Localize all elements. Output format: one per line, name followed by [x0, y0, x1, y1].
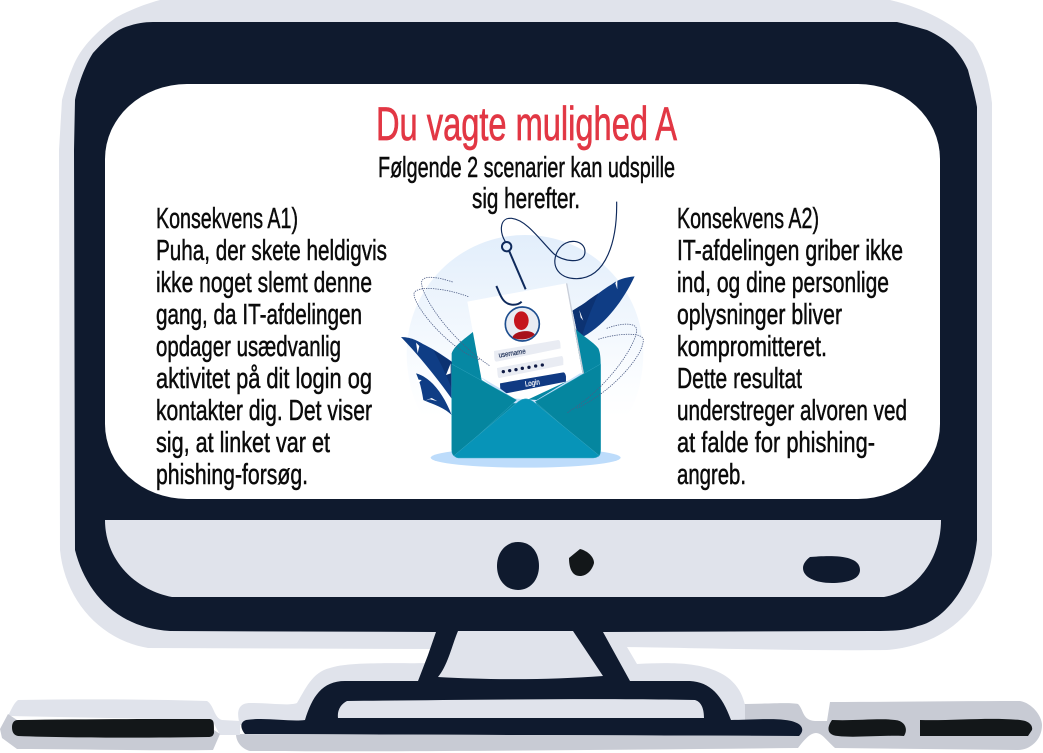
text block: Konsekvens A2: understreger alvoren ved — [677, 395, 907, 427]
paper — [467, 283, 583, 403]
login button: Login — [524, 377, 540, 389]
dotted swirls — [414, 277, 643, 413]
text block: Konsekvens A2: ind, og dine personlige — [677, 267, 889, 299]
monitor chin panel — [105, 520, 941, 597]
text block: Konsekvens A1: Konsekvens A1) — [156, 203, 298, 235]
monitor screen — [105, 84, 940, 499]
subtitle: sig herefter. — [472, 183, 580, 215]
camera lens — [497, 542, 539, 590]
text block: Konsekvens A1: ikke noget slemt denne — [156, 267, 372, 299]
text block: Konsekvens A1: kontakter dig. Det viser — [156, 395, 372, 427]
text block: Konsekvens A2: oplysninger bliver — [677, 299, 842, 331]
power button — [569, 549, 594, 576]
text block: Konsekvens A1: Puha, der skete heldigvis — [156, 235, 387, 267]
text block: Konsekvens A1: sig, at linket var et — [156, 427, 330, 459]
text block: Konsekvens A2 — [677, 203, 907, 491]
text block: Konsekvens A1: gang, da IT-afdelingen — [156, 299, 362, 331]
text block: Konsekvens A2: IT-afdelingen griber ikke — [677, 235, 903, 267]
right key 1 — [828, 719, 906, 737]
text block: Konsekvens A1 — [156, 203, 387, 491]
fishing hook — [496, 242, 526, 305]
pale inner envelope — [480, 373, 583, 403]
text block: Konsekvens A1: phishing-forsøg. — [156, 459, 308, 491]
stand base opening — [338, 699, 704, 718]
keyboard right section — [740, 701, 1042, 750]
text block: Konsekvens A2: at falde for phishing- — [677, 427, 875, 459]
text block: Konsekvens A2: Konsekvens A2) — [677, 203, 819, 235]
keyboard — [0, 699, 1032, 751]
monitor stand neck — [438, 631, 603, 679]
envelope back — [452, 328, 601, 450]
text block: Konsekvens A1: aktivitet på dit login og — [156, 363, 372, 395]
right key 2 — [920, 719, 1032, 736]
background glow — [407, 235, 643, 417]
left leaves — [401, 337, 455, 415]
envelope right flap — [535, 364, 601, 457]
shadow ellipse — [431, 448, 621, 468]
illustration: phishing envelope — [401, 202, 643, 468]
text block: Konsekvens A2: Dette resultat — [677, 363, 802, 395]
username field: username — [498, 346, 526, 360]
subtitle — [378, 152, 675, 215]
text block: Konsekvens A2: angreb. — [677, 459, 746, 491]
keyboard centre shadow — [236, 734, 800, 751]
username field — [494, 340, 561, 362]
avatar — [505, 307, 539, 341]
envelope left flap — [452, 364, 517, 457]
subtitle: Følgende 2 scenarier kan udspille — [378, 152, 675, 184]
keyboard left key shadow — [0, 714, 220, 750]
status pill — [803, 556, 860, 583]
fishing line — [501, 202, 617, 279]
text block: Konsekvens A2: kompromitteret. — [677, 331, 827, 363]
title: Du vagte mulighed A — [376, 97, 677, 150]
login button — [500, 372, 566, 394]
right leaf — [573, 276, 635, 337]
password field — [497, 356, 563, 378]
keyboard left key halo — [8, 699, 240, 735]
text block: Konsekvens A1: opdager usædvanlig — [156, 331, 341, 363]
envelope front — [454, 399, 599, 458]
left key — [12, 719, 214, 738]
